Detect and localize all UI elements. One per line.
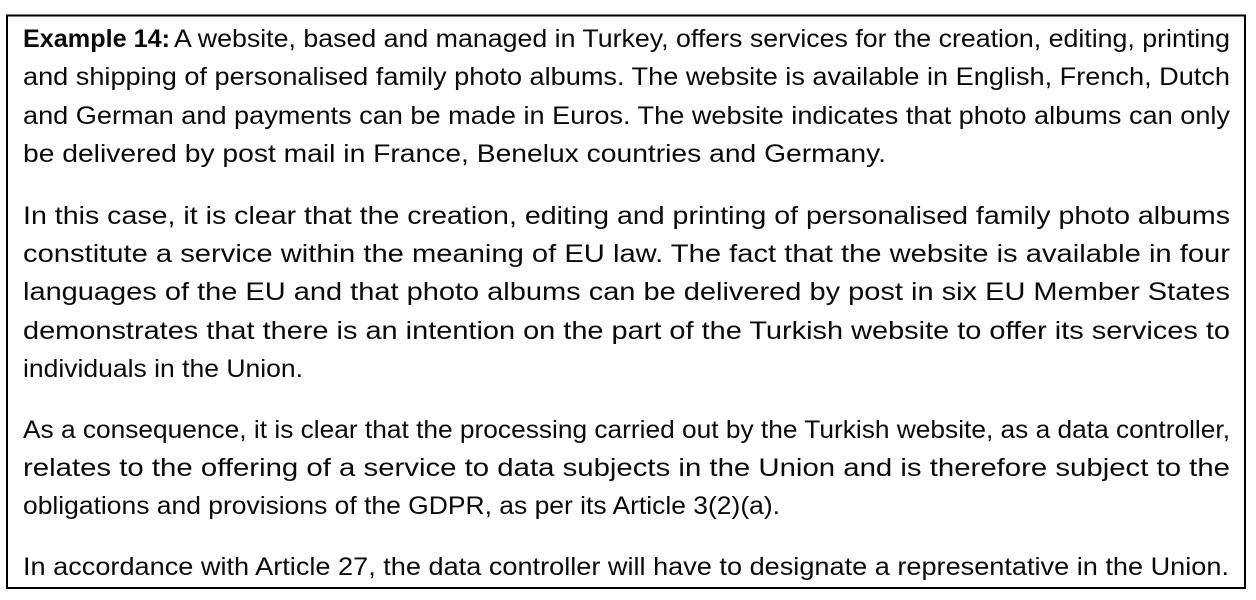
paragraph 1: scenario: A website, based and managed in Turkey, offers services for the creation, editing, printing [174, 25, 1230, 53]
paragraph 1: scenario: and shipping of personalised family photo albums. The website is available in English, French, Dutch [23, 63, 1230, 91]
paragraph 1: scenario: and German and payments can be made in Euros. The website indicates that photo albums can only [23, 102, 1231, 130]
paragraph 2: analysis: constitute a service within the meaning of EU law. The fact that the website is available in four [23, 240, 1230, 268]
paragraph 2: analysis: languages of the EU and that photo albums can be delivered by post in six EU Member States [23, 278, 1230, 306]
paragraph 2: analysis [23, 202, 1230, 383]
paragraph 1: scenario: be delivered by post mail in France, Benelux countries and Germany. [23, 140, 886, 168]
paragraph 1: scenario [23, 25, 1231, 168]
paragraph 2: analysis: individuals in the Union. [23, 355, 303, 383]
paragraph 4: representative: In accordance with Article 27, the data controller will have to designate a representative in the Union. [23, 553, 1229, 581]
heading: Example 14: Example 14: [23, 25, 170, 53]
paragraph 2: analysis: In this case, it is clear that the creation, editing and printing of personalised family photo albums [23, 202, 1230, 230]
paragraph 3: consequence: As a consequence, it is clear that the processing carried out by the Turkish website, as a data controller, [23, 416, 1230, 444]
paragraph 2: analysis: demonstrates that there is an intention on the part of the Turkish website to offer its services to [23, 317, 1230, 345]
paragraph 3: consequence: relates to the offering of a service to data subjects in the Union and is therefore subject to the [23, 454, 1230, 482]
paragraph 3: consequence: obligations and provisions of the GDPR, as per its Article 3(2)(a). [23, 492, 780, 520]
paragraph 3: consequence [23, 416, 1230, 520]
